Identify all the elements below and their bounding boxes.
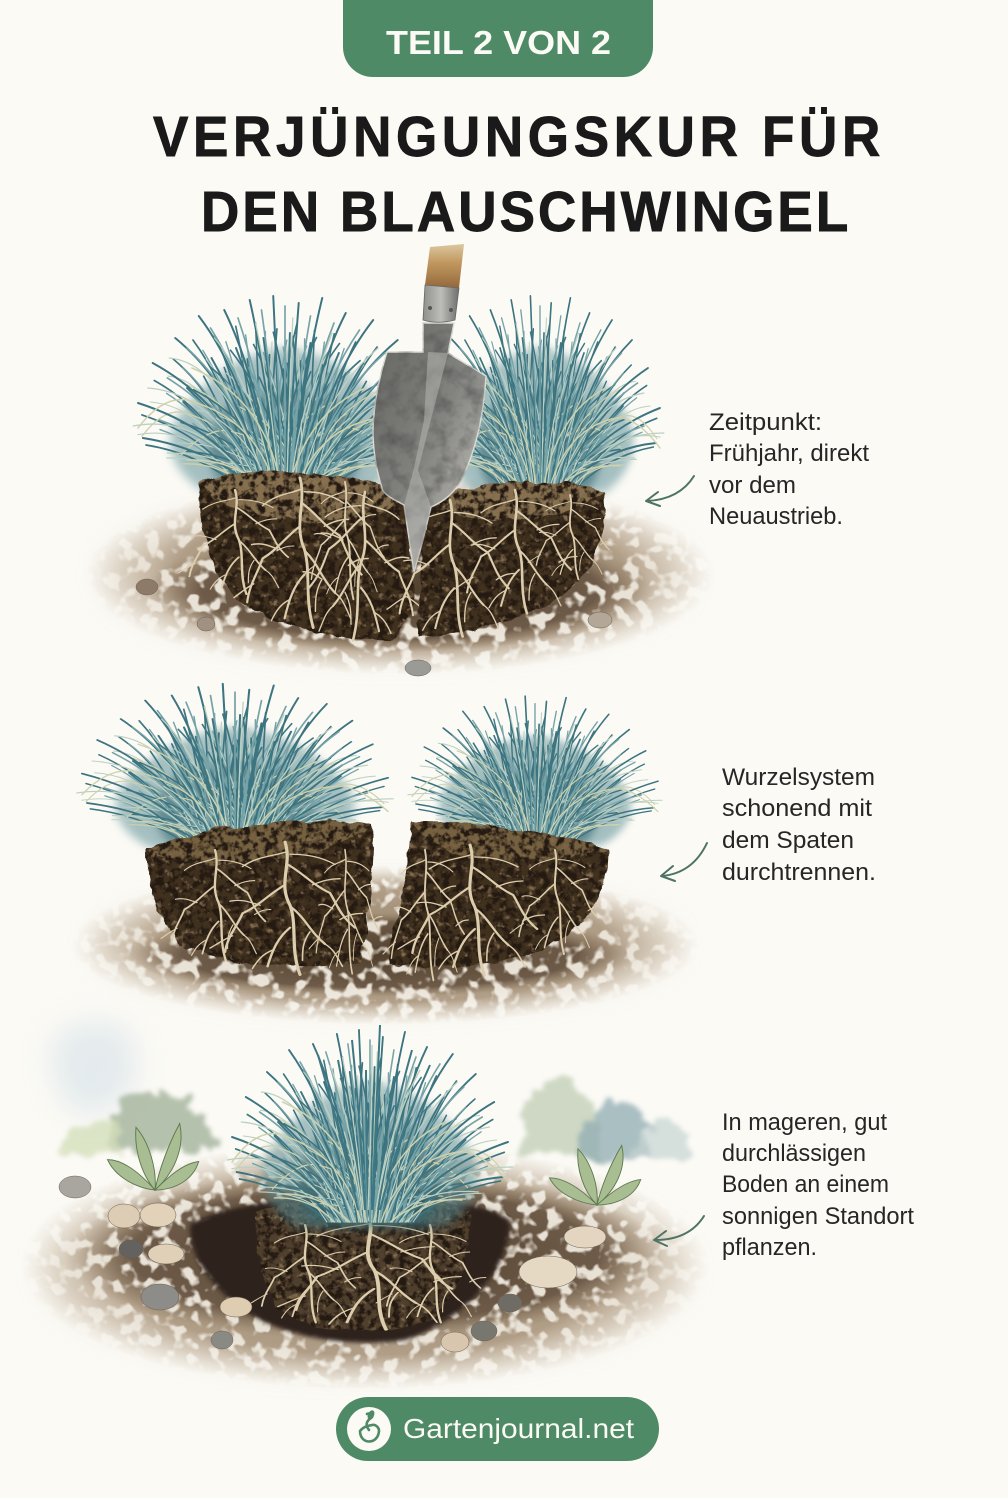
label: In mageren: sonnigen Standort <box>722 1203 914 1230</box>
arrow 1 <box>646 476 694 506</box>
header tab: TEIL 2 VON 2 <box>386 24 611 61</box>
right root ball <box>383 822 608 980</box>
footer badge <box>336 1397 659 1461</box>
illustration: two separated clumps <box>70 684 700 1025</box>
illustration: replanted clump <box>20 1021 710 1390</box>
header tab <box>343 0 653 77</box>
title <box>153 104 880 243</box>
label: Wurzelsystem: schonend mit <box>722 795 872 822</box>
label: In mageren: pflanzen. <box>722 1234 817 1261</box>
left root ball <box>146 821 382 975</box>
planting hole <box>190 1196 510 1343</box>
illustration: spade cutting the plant <box>85 244 715 675</box>
label: Zeitpunkt <box>709 409 869 530</box>
left grass tuft <box>133 296 437 493</box>
left grass tuft <box>77 684 393 849</box>
right grass tuft <box>416 296 664 493</box>
label: Zeitpunkt: Neuaustrieb. <box>709 503 843 530</box>
right small plant <box>550 1146 641 1205</box>
stones <box>59 1176 606 1352</box>
footer badge: Gartenjournal.net <box>403 1413 634 1444</box>
root ball <box>251 1199 486 1331</box>
grass tuft <box>227 1025 513 1227</box>
arrow 2 <box>661 843 707 881</box>
icon: plant logo <box>347 1407 391 1451</box>
ground scatter row 3 <box>20 1140 710 1390</box>
label: Wurzelsystem <box>722 764 876 886</box>
spade <box>373 244 486 572</box>
stones row 1 <box>136 579 612 676</box>
label: Zeitpunkt: Zeitpunkt: <box>709 409 822 436</box>
label: In mageren: durchlässigen <box>722 1140 866 1167</box>
label: Wurzelsystem: durchtrennen. <box>722 859 876 886</box>
title: VERJÜNGUNGSKUR FÜR <box>153 104 880 168</box>
title: DEN BLAUSCHWINGEL <box>201 179 848 243</box>
right grass tuft <box>408 696 662 846</box>
right root ball <box>387 482 613 636</box>
ground scatter row 1 <box>85 475 715 675</box>
ground scatter row 2 <box>70 865 700 1025</box>
background wash and shrubs <box>52 1021 688 1160</box>
label: In mageren: Boden an einem <box>722 1171 889 1198</box>
arrow 3 <box>654 1216 704 1246</box>
label: Wurzelsystem: dem Spaten <box>722 827 854 854</box>
label: In mageren <box>722 1109 914 1261</box>
label: Wurzelsystem: Wurzelsystem <box>722 764 875 791</box>
left small plant <box>108 1124 199 1190</box>
left root ball <box>178 473 425 640</box>
label: Zeitpunkt: vor dem <box>709 472 796 499</box>
label: Zeitpunkt: Frühjahr, direkt <box>709 440 869 467</box>
label: In mageren: In mageren, gut <box>722 1109 887 1136</box>
